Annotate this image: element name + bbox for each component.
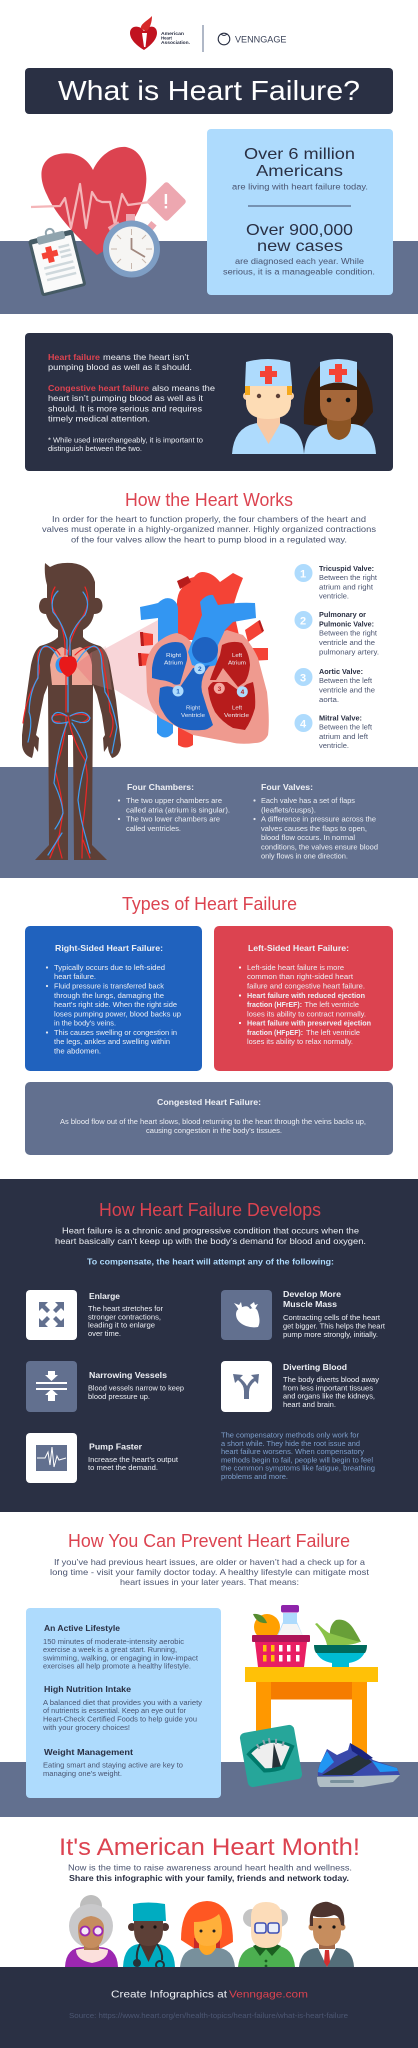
- text: how the heart works intro: In order for the heart to function properly, the four chambers of the heart and: [52, 514, 366, 524]
- valve 3: [294, 668, 375, 704]
- panel: left-sided heart failure: loses its ability to relax normally.: [247, 1039, 353, 1046]
- icon: muscle heart: [221, 1290, 272, 1340]
- valve 2: Pulmonic Valve:: [319, 622, 374, 628]
- right ventricle: [159, 665, 213, 730]
- text: four chambers: called atria (atrium is singular).: [126, 808, 230, 814]
- text: compensate: To compensate, the heart will attempt any of the following:: [87, 1256, 334, 1266]
- text: four valves: A difference in pressure across the: [261, 816, 376, 824]
- panel: left-sided heart failure: loses its ability to contract normally.: [247, 1012, 366, 1018]
- icon: ECG line: [31, 184, 150, 228]
- valve 3: ventricle and the: [319, 688, 375, 694]
- text: compensatory note: the common symptoms like fatigue, breathing: [221, 1466, 375, 1472]
- heading: american heart month: It's American Heart Month!: [59, 1834, 360, 1861]
- valve markers: 1: [176, 688, 180, 696]
- item: narrowing vessels: Blood vessels narrow to keep: [88, 1386, 184, 1392]
- list: valves: [294, 564, 379, 750]
- icon: Venngage logo: [218, 33, 286, 46]
- text: four chambers: [118, 782, 230, 833]
- text: four chambers: called ventricles.: [126, 826, 181, 833]
- lungs: [50, 647, 92, 685]
- icon: enlarge: [26, 1290, 77, 1340]
- bottle: [277, 1605, 303, 1636]
- item: pump faster: Increase the heart’s output: [88, 1457, 178, 1464]
- panel: left-sided heart failure: Left-side heart failure is more: [247, 965, 344, 972]
- text: call to action: Create Infographics at: [111, 1988, 227, 2000]
- item: enlarge: The heart stretches for: [88, 1306, 164, 1313]
- text: definitions: means the heart isn’t: [103, 353, 190, 362]
- chamber labels: Left: [232, 653, 242, 659]
- text: four valves: blood flow occurs. In normal: [261, 835, 355, 842]
- text: how the heart works intro: valves must operate in a highly-organized manner. Highly organized contractions: [42, 524, 376, 534]
- valve 4: atrium and left: [319, 734, 368, 741]
- item: diverting blood: heart and brain.: [283, 1402, 336, 1409]
- panel: left-sided heart failure: failure and congestive heart failure.: [247, 984, 365, 990]
- title: [25, 68, 393, 114]
- text: compensatory note: a short while. They hide the root issue and: [221, 1441, 360, 1448]
- icon: American Heart Association logo: American: [161, 31, 184, 36]
- item: develop more muscle mass: pump more strongly, initially.: [283, 1332, 378, 1339]
- panel: right-sided heart failure: Right-Sided Heart Failure:: [55, 943, 163, 953]
- text: definitions: [48, 353, 216, 453]
- panel: right-sided heart failure: Typically occurs due to left-sided: [54, 965, 165, 972]
- text: intro: heart basically can’t keep up with the body’s demand for blood and oxygen.: [55, 1236, 366, 1246]
- valve 4: 4: [300, 718, 307, 730]
- text: four chambers: The two lower chambers are: [126, 816, 220, 824]
- text: call to share: [68, 1862, 352, 1883]
- stat: 900,000: new cases: [257, 238, 343, 255]
- text: definitions: should. It is more serious and requires: [48, 404, 202, 414]
- tip: active lifestyle: exercise a week is a great start. Running,: [43, 1647, 177, 1654]
- item: narrowing vessels: [26, 1361, 184, 1412]
- stat: 900,000: Over 900,000: [246, 222, 353, 239]
- text: four valves: [253, 782, 378, 860]
- chamber labels: Ventricle: [224, 713, 249, 719]
- icon: weight scale: [239, 1724, 303, 1788]
- item: diverting blood: from less important tissues: [283, 1386, 374, 1392]
- panel: left-sided heart failure: The left ventricle: [304, 1002, 359, 1009]
- logos: [130, 16, 286, 52]
- icon: American Heart Association logo: Association.: [161, 40, 190, 45]
- heading: how the heart works: How the Heart Works: [125, 489, 293, 510]
- tip: weight management: managing one's weight.: [43, 1771, 122, 1778]
- item: narrowing vessels: Narrowing Vessels: [89, 1370, 167, 1380]
- panel: left-sided heart failure: common than right-sided heart: [247, 974, 353, 981]
- text: four chambers: The two upper chambers are: [126, 798, 222, 805]
- blood vessels: [23, 587, 117, 858]
- valve markers: 3: [218, 686, 222, 693]
- valve 2: Pulmonary or: [319, 612, 366, 619]
- valve 2: ventricle and the: [319, 640, 375, 647]
- panel: intro band: [0, 241, 418, 314]
- text: prevention intro: [50, 1557, 370, 1587]
- text: call to share: Now is the time to raise awareness around heart health and wellness.: [68, 1862, 352, 1872]
- icon: narrowing vessels: [26, 1361, 77, 1412]
- tip: weight management: Eating smart and staying active are key to: [43, 1762, 183, 1770]
- valve 1: atrium and right: [319, 584, 373, 592]
- panel: healthy lifestyle tips: [26, 1608, 221, 1798]
- valve 2: pulmonary artery.: [319, 650, 379, 656]
- valve 3: 3: [300, 672, 306, 684]
- basket: [252, 1635, 310, 1667]
- right atrium: [152, 642, 187, 685]
- item: develop more muscle mass: Contracting cells of the heart: [283, 1315, 380, 1322]
- icon: diverting arrows: [221, 1361, 272, 1412]
- text: definitions: also means the: [152, 384, 216, 393]
- stat: 6 million: Americans: [256, 163, 343, 180]
- heart wall: [146, 630, 269, 744]
- title: What is Heart Failure?: [58, 75, 360, 106]
- panel: right-sided heart failure: loses pumping power, blood backs up: [54, 1012, 181, 1018]
- tip: high nutrition intake: High Nutrition Intake: [44, 1684, 131, 1694]
- valve 1: [294, 564, 377, 600]
- illustration: heart cross-section: [138, 572, 269, 748]
- item: pump faster: Pump Faster: [89, 1442, 143, 1452]
- text: intro: [55, 1226, 366, 1246]
- valve markers: 2: [198, 666, 202, 673]
- tip: high nutrition intake: of nutrients is essential. Keep an eye out for: [43, 1708, 187, 1715]
- valve 2: 2: [300, 616, 306, 628]
- panel: how heart failure develops: [0, 1179, 418, 1512]
- illustration: human body with circulatory system: [22, 563, 121, 860]
- panel: left-sided heart failure: Heart failure with reduced ejection: [247, 993, 365, 1000]
- text: definitions: pumping blood as well as it should.: [48, 363, 192, 372]
- panel: congested heart failure: Congested Heart Failure:: [157, 1097, 261, 1107]
- tip: weight management: Weight Management: [44, 1747, 133, 1757]
- valve 4: Between the left: [319, 724, 372, 732]
- text: definitions: Congestive heart failure: [48, 384, 150, 393]
- text: compensatory note: heart failure worsens. When compensatory: [221, 1449, 365, 1456]
- stat: 900,000: [223, 222, 375, 276]
- valve 1: Tricuspid Valve:: [319, 566, 374, 573]
- item: diverting blood: and organs like the kidneys,: [283, 1394, 375, 1400]
- item: develop more muscle mass: Develop More: [283, 1289, 341, 1299]
- text: definitions: distinguish between the two.: [48, 446, 142, 453]
- panel: left-sided heart failure: fraction (HFpEF):: [247, 1030, 303, 1037]
- item: narrowing vessels: blood pressure up.: [88, 1394, 150, 1401]
- text: four chambers: Four Chambers:: [127, 782, 194, 792]
- text: compensatory note: methods begin to fail, people will begin to feel: [221, 1458, 373, 1464]
- wedge overlay on body: [75, 646, 112, 690]
- text: definitions: Heart failure: [48, 353, 101, 362]
- text: call to share: Share this infographic with your family, friends and network today.: [69, 1873, 349, 1883]
- chamber labels: Left: [232, 706, 242, 712]
- valve 4: [294, 714, 372, 750]
- valve 1: Between the right: [319, 575, 377, 582]
- item: develop more muscle mass: get bigger. This helps the heart: [283, 1324, 385, 1330]
- text: how the heart works intro: of the four valves allow the heart to pump blood in a regulated way.: [71, 534, 347, 544]
- item: pump faster: to meet the demand.: [88, 1465, 158, 1472]
- text: four valves: Each valve has a set of flaps: [261, 798, 356, 805]
- icon: warning diamond: [146, 181, 187, 222]
- panel: right-sided heart failure: in the body's veins.: [54, 1020, 116, 1028]
- text: prevention intro: If you’ve had previous heart issues, are older or haven’t had a check up for a: [54, 1557, 365, 1567]
- icon: female doctor: [304, 359, 376, 454]
- tip: active lifestyle: An Active Lifestyle: [44, 1623, 120, 1633]
- tip: active lifestyle: swimming, walking, or engaging in low-impact: [43, 1656, 198, 1662]
- left atrium: [210, 642, 250, 687]
- stat: 6 million: Over 6 million: [244, 146, 355, 163]
- panel: prevention band: [0, 1762, 418, 1817]
- text: prevention intro: heart issues in your later years. That means:: [120, 1577, 299, 1587]
- text: call to action: [111, 1988, 308, 2000]
- blue pulmonary artery: [188, 595, 256, 668]
- text: compensatory note: problems and more.: [221, 1474, 288, 1481]
- table: [245, 1667, 378, 1757]
- person: doctor: [123, 1902, 175, 1969]
- valve markers: 4: [241, 689, 245, 696]
- footer: [0, 1967, 418, 2048]
- icon: male doctor: [232, 359, 304, 454]
- item: enlarge: over time.: [88, 1331, 121, 1338]
- tip: active lifestyle: 150 minutes of moderate-intensity aerobic: [43, 1639, 185, 1646]
- heading: how you can prevent heart failure: How You Can Prevent Heart Failure: [68, 1530, 350, 1551]
- panel: right-sided heart failure: This causes swelling or congestion in: [54, 1030, 177, 1037]
- heading: How Heart Failure Develops: [99, 1199, 321, 1220]
- stat: 900,000: serious, it is a manageable condition.: [223, 268, 375, 276]
- text: definitions: heart isn’t pumping blood as well as it: [48, 394, 204, 403]
- valve 3: Aortic Valve:: [319, 669, 363, 676]
- valve 1: ventricle.: [319, 594, 349, 600]
- stat: 900,000: are diagnosed each year. While: [235, 257, 364, 266]
- text: four valves: Four Valves:: [261, 782, 313, 792]
- chamber labels: Right: [166, 653, 182, 659]
- person: woman with red hair: [180, 1901, 235, 1967]
- valve 2: [294, 611, 379, 656]
- callout wedge from body heart to enlarged heart: [75, 620, 158, 716]
- stat: 6 million: are living with heart failure today.: [232, 182, 368, 192]
- text: four valves: conditions, the valves ensure blood: [261, 844, 378, 852]
- illustration: five people: [65, 1895, 354, 1969]
- panel: definition: [25, 333, 393, 471]
- valve 4: ventricle.: [319, 743, 349, 750]
- item: diverting blood: [221, 1361, 380, 1412]
- icon: heart: [41, 147, 146, 255]
- panel: right-sided heart failure: the legs, ankles and swelling within: [54, 1039, 170, 1046]
- orange: [253, 1614, 280, 1640]
- item: develop more muscle mass: [221, 1289, 385, 1340]
- chamber labels: Atrium: [164, 660, 184, 666]
- blue vena cava: [140, 598, 178, 738]
- tip: high nutrition intake: with your grocery choices!: [42, 1725, 130, 1732]
- text: call to action: Venngage.com: [229, 1988, 308, 2000]
- item: diverting blood: The body diverts blood away: [283, 1377, 380, 1384]
- text: compensatory note: The compensatory methods only work for: [221, 1432, 360, 1440]
- tip: high nutrition intake: A balanced diet that provides you with a variety: [43, 1700, 203, 1707]
- leafy greens: [315, 1620, 361, 1645]
- chamber labels: Right: [186, 706, 201, 712]
- panel: right-sided heart failure: heart's right side. When the right side: [54, 1002, 177, 1009]
- bowl: [314, 1645, 367, 1667]
- panel: congested heart failure: [25, 1082, 393, 1155]
- icon: clipboard: [26, 223, 87, 297]
- panel: left-sided heart failure: The left ventricle: [306, 1030, 360, 1037]
- text: source: Source: https://www.heart.org/en/health-topics/heart-failure/what-is-heart-failure: [69, 2011, 348, 2020]
- icon: sneaker: [317, 1743, 400, 1787]
- valve markers: [172, 663, 248, 697]
- item: enlarge: Enlarge: [89, 1291, 120, 1301]
- icon: American Heart Association logo: Heart: [161, 36, 173, 40]
- item: enlarge: stronger contractions,: [88, 1314, 161, 1322]
- valve 4: Mitral Valve:: [319, 716, 362, 722]
- person: old man with glasses: [238, 1902, 295, 1967]
- valve 1: 1: [300, 568, 306, 580]
- text: how the heart works intro: [42, 514, 376, 544]
- heading: types of heart failure: Types of Heart Failure: [122, 893, 297, 914]
- panel: left-sided heart failure: Left-Sided Heart Failure:: [248, 943, 349, 953]
- valve 3: aorta.: [319, 697, 339, 704]
- panel: right-sided heart failure: through the lungs, damaging the: [54, 993, 164, 1000]
- tip: high nutrition intake: [42, 1684, 203, 1732]
- panel: right-sided heart failure: [25, 926, 202, 1071]
- person: grandmother: [65, 1895, 118, 1967]
- panel: congested heart failure: As blood flow out of the heart slows, blood returning to the heart through the veins backs up,: [60, 1119, 366, 1126]
- text: four valves: valves causes the flaps to open,: [261, 826, 367, 833]
- illustration: table with healthy food: [239, 1605, 400, 1788]
- item: pump faster: [26, 1433, 178, 1483]
- panel: left-sided heart failure: fraction (HFrEF):: [247, 1002, 302, 1009]
- icon: American Heart Association logo: [130, 16, 190, 50]
- chamber labels: [164, 653, 249, 719]
- chamber labels: Atrium: [228, 660, 246, 666]
- left ventricle: [208, 682, 255, 730]
- tip: high nutrition intake: Heart-Check Certified Foods to help guide you: [43, 1716, 197, 1724]
- panel: statistics: [207, 129, 393, 295]
- text: definitions: timely medical attention.: [48, 414, 150, 424]
- text: intro: Heart failure is a chronic and progressive condition that occurs when the: [62, 1226, 359, 1236]
- item: diverting blood: Diverting Blood: [283, 1362, 347, 1372]
- item: enlarge: leading it to enlarge: [88, 1322, 155, 1330]
- stat: 6 million: [232, 146, 368, 192]
- tip: active lifestyle: [43, 1623, 198, 1670]
- panel: four chambers and valves band: [0, 767, 418, 878]
- panel: left-sided heart failure: Heart failure with preserved ejection: [247, 1020, 371, 1028]
- panel: left-sided heart failure: [214, 926, 393, 1071]
- item: enlarge: [26, 1290, 164, 1340]
- illustration: heart with ECG, clock and clipboard: [26, 147, 187, 297]
- text: definitions: * While used interchangeably, it is important to: [48, 438, 203, 444]
- chamber labels: Ventricle: [181, 713, 205, 719]
- tip: weight management: [43, 1747, 183, 1778]
- icon: stopwatch: [103, 214, 160, 278]
- valve 3: Between the left: [319, 678, 372, 685]
- item: develop more muscle mass: Muscle Mass: [283, 1299, 337, 1309]
- panel: right-sided heart failure: Fluid pressure is transferred back: [54, 984, 165, 990]
- panel: right-sided heart failure: the abdomen.: [54, 1048, 101, 1056]
- person: man in suit: [299, 1902, 354, 1967]
- panel: right-sided heart failure: heart failure.: [54, 974, 96, 981]
- icon: Venngage logo: VENNGAGE: [235, 34, 286, 46]
- text: four valves: only flows in one direction.: [261, 854, 348, 860]
- text: four valves: (leaflets/cusps).: [261, 808, 316, 814]
- icon: heart monitor: [26, 1433, 77, 1483]
- small heart: [56, 656, 77, 677]
- panel: congested heart failure: causing congestion in the body's tissues.: [146, 1128, 282, 1135]
- red aorta and pulmonary vessels: [138, 572, 268, 748]
- text: prevention intro: long time - visit your family doctor today. A healthy lifestyle can mitigate most: [50, 1567, 370, 1577]
- tip: active lifestyle: exercises all help promote a healthy lifestyle.: [43, 1664, 191, 1670]
- valve 2: Between the right: [319, 630, 377, 638]
- text: compensatory note: [221, 1432, 375, 1481]
